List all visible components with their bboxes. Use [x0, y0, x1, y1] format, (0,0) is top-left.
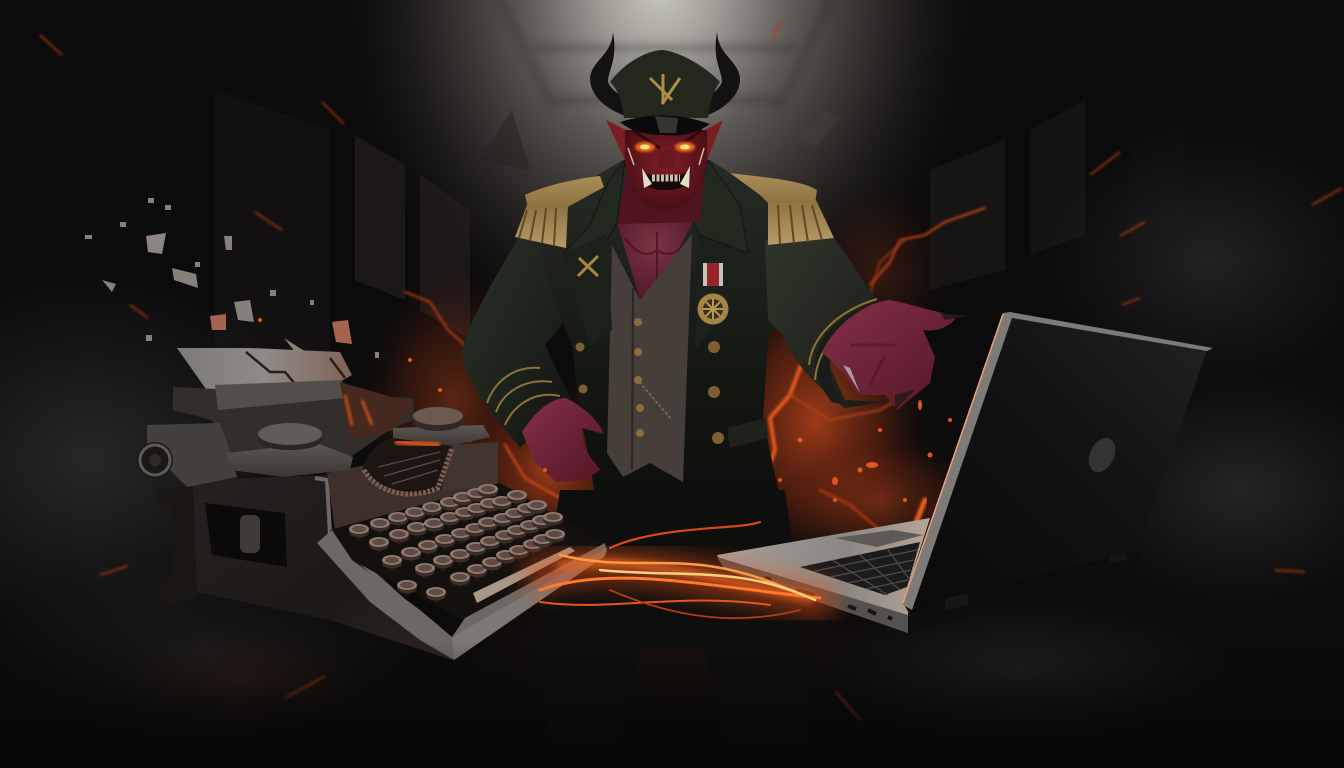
basket housing [327, 465, 500, 530]
smoke clouds [0, 130, 1344, 740]
cap visor [620, 115, 710, 136]
round knobs [258, 407, 463, 450]
type basket [363, 438, 452, 491]
typewriter [137, 348, 607, 660]
ears [606, 120, 630, 160]
sparks [258, 318, 952, 502]
pocket flap [727, 418, 768, 448]
carriage [173, 387, 414, 456]
lapels [563, 160, 625, 254]
jacket buttons [576, 341, 724, 444]
left arm [462, 225, 580, 448]
glowing eyes [635, 142, 695, 152]
front edge [717, 557, 908, 633]
right platform [393, 425, 490, 446]
right block [442, 442, 498, 490]
support leg [157, 485, 197, 605]
jacket body [530, 160, 795, 520]
waistcoat [607, 234, 692, 482]
medal [698, 263, 728, 324]
fire glow behind figure [100, 180, 980, 730]
front rim [317, 530, 607, 660]
laptop [717, 312, 1213, 634]
right cuff [815, 300, 884, 405]
touchpad [835, 530, 923, 547]
centre platform [227, 443, 353, 477]
right arm [765, 235, 885, 408]
hip hand [522, 398, 604, 482]
trousers [535, 490, 812, 768]
black hinge strip [908, 552, 1138, 634]
waistcoat buttons [634, 318, 644, 437]
collar badge [578, 256, 598, 276]
laptop lid [908, 313, 1207, 608]
keyboard [800, 542, 920, 595]
space bar [473, 547, 575, 603]
body highlight [315, 478, 420, 615]
bottom shadow [0, 640, 1344, 768]
neck [617, 165, 705, 224]
right horn [695, 32, 740, 118]
cap [610, 50, 720, 118]
lightning behind the demon [405, 208, 985, 545]
face [625, 130, 707, 211]
bare chest [617, 222, 693, 300]
fanged mouth [643, 170, 691, 190]
lid logo [1084, 434, 1120, 476]
silver lid rim [903, 312, 1213, 610]
left cuff stripes [487, 368, 560, 425]
flying debris [85, 198, 379, 358]
main body [193, 475, 452, 660]
pointing hand [822, 300, 957, 410]
platen knob [137, 442, 173, 478]
cap badge [650, 74, 680, 104]
epaulettes [515, 173, 834, 248]
key bed [330, 483, 603, 620]
nose [658, 150, 676, 168]
fire beam connecting typewriter and laptop [540, 522, 820, 618]
demon officer [462, 32, 968, 768]
laptop base [717, 518, 930, 633]
left block [147, 423, 237, 487]
paper roller [177, 348, 352, 392]
left horn [590, 32, 635, 118]
keys [349, 484, 565, 603]
side window [205, 503, 287, 567]
